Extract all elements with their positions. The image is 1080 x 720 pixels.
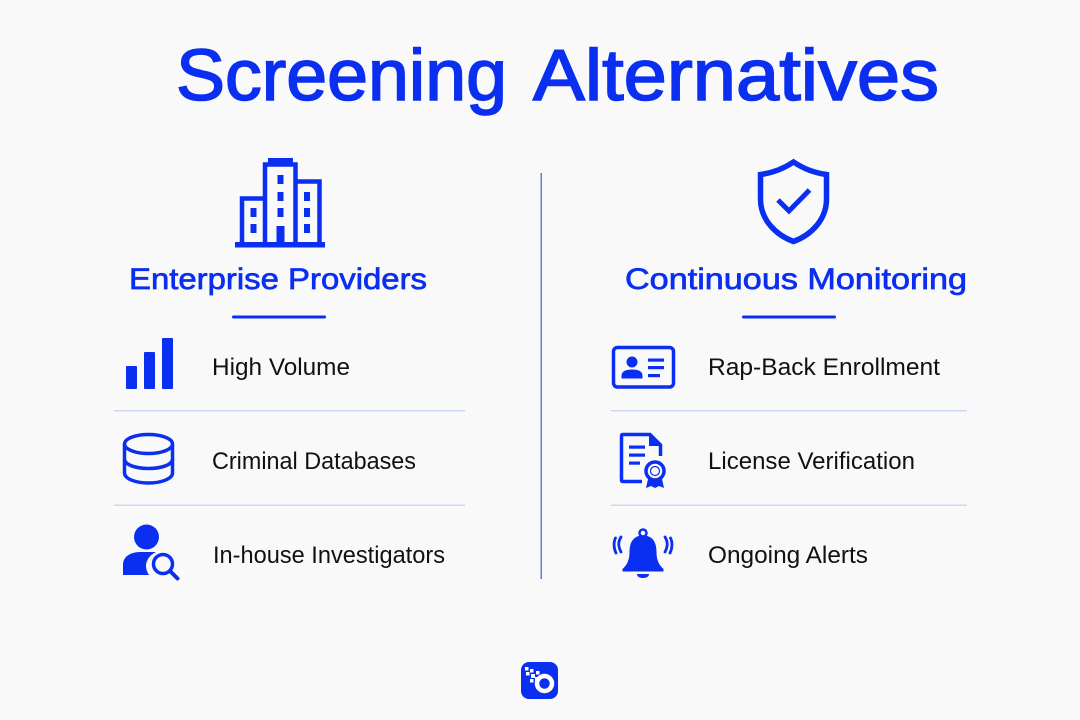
- panel: enterprise providers: [114, 158, 465, 578]
- label: Rap-Back Enrollment: Rap-Back Enrollment: [708, 354, 940, 381]
- row: High Volume: [126, 338, 350, 389]
- heading underline: [742, 316, 836, 318]
- icon: database: [124, 434, 172, 483]
- icon: shield with check: [760, 162, 826, 242]
- title: [176, 36, 939, 116]
- row: License Verification: [622, 433, 915, 488]
- heading: Continuous Monitoring: Continuous Monitoring: [625, 263, 967, 296]
- label: Criminal Databases: Criminal Databases: [212, 448, 416, 475]
- row: Ongoing Alerts: [614, 530, 868, 578]
- footer logo: [521, 662, 558, 699]
- panel: continuous monitoring: [611, 162, 967, 578]
- heading underline: [232, 316, 326, 318]
- center divider: [540, 173, 542, 579]
- label: Ongoing Alerts: Ongoing Alerts: [708, 542, 868, 569]
- icon: certificate document: [622, 433, 664, 488]
- row: Rap-Back Enrollment: [614, 348, 940, 387]
- icon: office buildings: [235, 158, 325, 248]
- label: License Verification: License Verification: [708, 448, 915, 475]
- label: In-house Investigators: In-house Investigators: [213, 542, 445, 569]
- row: In-house Investigators: [123, 524, 445, 578]
- label: High Volume: High Volume: [212, 354, 350, 381]
- icon: bar chart: [126, 338, 173, 389]
- row: Criminal Databases: [124, 434, 416, 483]
- icon: person with magnifier: [123, 524, 178, 578]
- title: Alternatives: [533, 36, 939, 116]
- icon: ringing bell: [614, 530, 672, 578]
- icon: ID card: [614, 348, 674, 387]
- title: Screening: [176, 36, 507, 116]
- heading: Enterprise Providers: Enterprise Providers: [129, 263, 427, 296]
